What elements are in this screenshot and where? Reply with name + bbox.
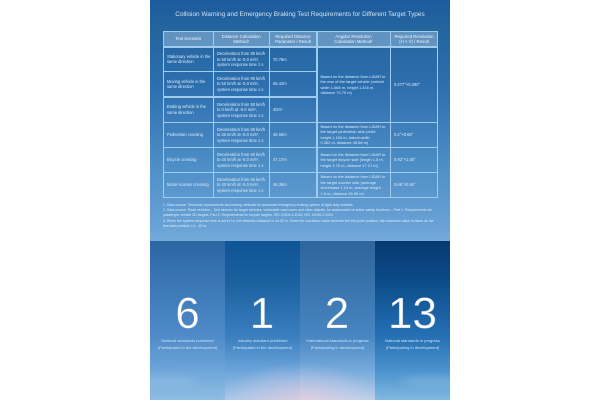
row: bicycle crossing: Bicycle crossing [167, 157, 196, 162]
panel 2 shade [225, 241, 300, 400]
statistic label: 1: (Participated in the development) [233, 345, 292, 350]
row: pedestrian crossing: system response time 1 s [217, 138, 263, 142]
row: braking vehicle: Braking vehicle in the [167, 104, 206, 109]
row: stationary vehicle: Deceleration from 80 km/h [217, 51, 265, 56]
row: bicycle crossing: 47.17m [273, 157, 287, 162]
row: bicycle crossing [163, 148, 438, 172]
row: motor-scooter crossing: the target scooter side (average [320, 180, 376, 184]
row: pedestrian crossing: the target pedestrian side (child [320, 129, 375, 134]
row: pedestrian crossing: 0.2°×0.68° [394, 132, 413, 137]
row: bicycle crossing: height 1.75 m, distance 47.17 m) [320, 162, 378, 168]
table header row: Test Scenario [175, 36, 201, 41]
statistic label: 2: (Participating in development) [311, 345, 364, 350]
row: motor-scooter crossing: wheelbase 1.24 m, average height [320, 185, 381, 190]
row: moving vehicle: 66.42m [273, 81, 287, 86]
statistic label: 1: Industry standard published [238, 338, 287, 343]
statistic number: 6: 6 [175, 289, 200, 338]
row: pedestrian crossing: height 1.154 m, lateral width [320, 135, 370, 140]
row: bicycle crossing: system response time 1 s [217, 162, 263, 168]
row: pedestrian crossing: 0.362 m, distance 48.68 m) [320, 140, 368, 145]
statistic number: 13: 13 [388, 289, 437, 338]
statistic label: 6: National standards published [161, 338, 214, 343]
row: motor-scooter crossing: 46.36m [273, 182, 287, 187]
row: stationary vehicle [163, 47, 317, 71]
table header row: Method¹ [233, 39, 249, 44]
row: bicycle crossing: to 40 km/h at -5.0 m/s², [217, 157, 259, 162]
footnotes: 3. When the system response time is set to 1s, the detection distance is 44.32 m. Since the maximum value exceeds the test point position, the maximum value is taken as the test start position, i.e., 40 m. [163, 219, 434, 228]
panel 4 shade [375, 241, 450, 400]
row: moving vehicle [163, 72, 317, 97]
row: motor-scooter crossing: Deceleration from 60 km/h [217, 177, 265, 182]
row: bicycle crossing: Based on the distance from LiDAR to [320, 152, 385, 156]
statistic number: 1: 1 [250, 289, 274, 338]
statistic label: 2 [306, 338, 369, 350]
requirements table [163, 31, 438, 198]
row: bicycle crossing: 0.92°×1.08° [394, 157, 416, 162]
statistic label: 13: (Participating in development) [386, 345, 439, 350]
table header row: Calculation Method² [334, 39, 373, 44]
table header row: (H × V) / Result [399, 39, 429, 44]
row: stationary vehicle: system response time 1 s [217, 62, 263, 67]
row: motor-scooter crossing: Motor-scooter crossing [167, 182, 209, 187]
footnotes: 2. Data source: Road vehicles – Test devices for target vehicles, vulnerable road users and other objects, for assessment of active safety functions – Part 1: Requirements for passenger vehicle 3D targets; Part 2: Requirements for bicycle targets. ISO 19206-1:2018, ISO 19206-2:2024 [163, 208, 432, 217]
row: stationary vehicle: same direction [167, 59, 194, 64]
row: stationary vehicle: 70.78m [273, 56, 287, 62]
statistic label: 1 [233, 338, 292, 350]
footnotes [163, 202, 434, 228]
statistic label: 6: (Participated in the development) [158, 345, 217, 350]
statistic number: 2: 2 [325, 289, 349, 338]
table header row: Parameter / Result [275, 39, 311, 44]
horizon glow [220, 363, 380, 400]
merged cell: vehicle angular resolution method: distance 70.79 m) [320, 90, 352, 95]
row: stationary vehicle: to 50 km/h at -5.0 m/s², [217, 56, 259, 62]
row: braking vehicle [163, 97, 317, 122]
row: pedestrian crossing: 48.68m [273, 132, 287, 137]
footnotes: 1. Data source: Technical requirements and testing methods for advanced emergency braking system of light-duty vehicles [163, 202, 353, 206]
cloud right [400, 376, 465, 386]
statistic label: 13 [385, 338, 440, 350]
row: moving vehicle: Deceleration from 80 km/h [217, 76, 265, 81]
table header row: Angular Resolution [335, 34, 372, 39]
row: motor-scooter crossing: to 40 km/h at -5.0 m/s², [217, 182, 259, 187]
row: moving vehicle: to 55 km/h at -5.0 m/s², [217, 81, 259, 86]
panel 3 shade [300, 241, 375, 400]
row: motor-scooter crossing: system response time 1 s [217, 188, 263, 193]
panel 1 shade [150, 241, 225, 400]
cloud left [135, 376, 200, 386]
row: braking vehicle: system response time 1 s [217, 112, 263, 118]
row: pedestrian crossing: Based on the distance from LiDAR to [320, 124, 385, 129]
merged cell: vehicle angular resolution method: the rear of the target vehicle (vehicle [320, 79, 384, 84]
merged cell: vehicle angular resolution method: width 1.668 m, height 1.416 m, [320, 85, 374, 90]
row: braking vehicle: same direction [167, 110, 194, 115]
row: bicycle crossing: the target bicycle side (length 1.8 m, [320, 157, 384, 162]
merged cell: vehicle required resolution: 0.477°×0.390° [394, 82, 420, 87]
table header row [163, 31, 438, 47]
row: braking vehicle: to 0 km/h at -6.0 m/s², [217, 107, 257, 112]
row: pedestrian crossing: Deceleration from 60 km/h [217, 126, 265, 132]
row: motor-scooter crossing: 1.6 m, distance 46.36 m) [320, 190, 364, 196]
row: braking vehicle: Deceleration from 50 km/h [217, 102, 265, 106]
merged cell: vehicle required resolution [390, 47, 438, 122]
row: pedestrian crossing: Pedestrian crossing [167, 132, 203, 137]
table header row: Required Resolution [395, 34, 433, 39]
statistic label: 2: International standards in progress [306, 338, 369, 343]
row: braking vehicle: 40m³ [273, 107, 282, 112]
panel backgrounds: statistics [150, 241, 450, 400]
row: stationary vehicle: Stationary vehicle in the [167, 54, 210, 59]
merged cell: vehicle angular resolution method [316, 47, 390, 122]
row: motor-scooter crossing: 0.66°×0.95° [394, 182, 416, 187]
row: motor-scooter crossing: Based on the distance from LiDAR to [320, 174, 385, 179]
table header row: Distance Calculation [222, 34, 261, 39]
row: moving vehicle: Moving vehicle in the [167, 78, 205, 84]
title: Collision Warning and Emergency Braking Test Requirements for Different Target Types [175, 11, 425, 18]
row: bicycle crossing: Deceleration from 60 km/h [217, 152, 265, 156]
row: moving vehicle: same direction [167, 84, 194, 89]
merged cell: vehicle angular resolution method: Based on the distance from LiDAR to [320, 74, 385, 79]
statistic label: 6 [158, 338, 217, 350]
row: pedestrian crossing [163, 123, 438, 147]
statistic label: 13: National standards in progress [385, 338, 440, 343]
row: pedestrian crossing: to 35 km/h at -5.0 m/s², [217, 132, 259, 137]
table header row: Required Distance [275, 34, 311, 39]
poster background [150, 0, 450, 400]
row: motor-scooter crossing [163, 173, 438, 198]
row: moving vehicle: system response time 1 s [217, 87, 263, 92]
